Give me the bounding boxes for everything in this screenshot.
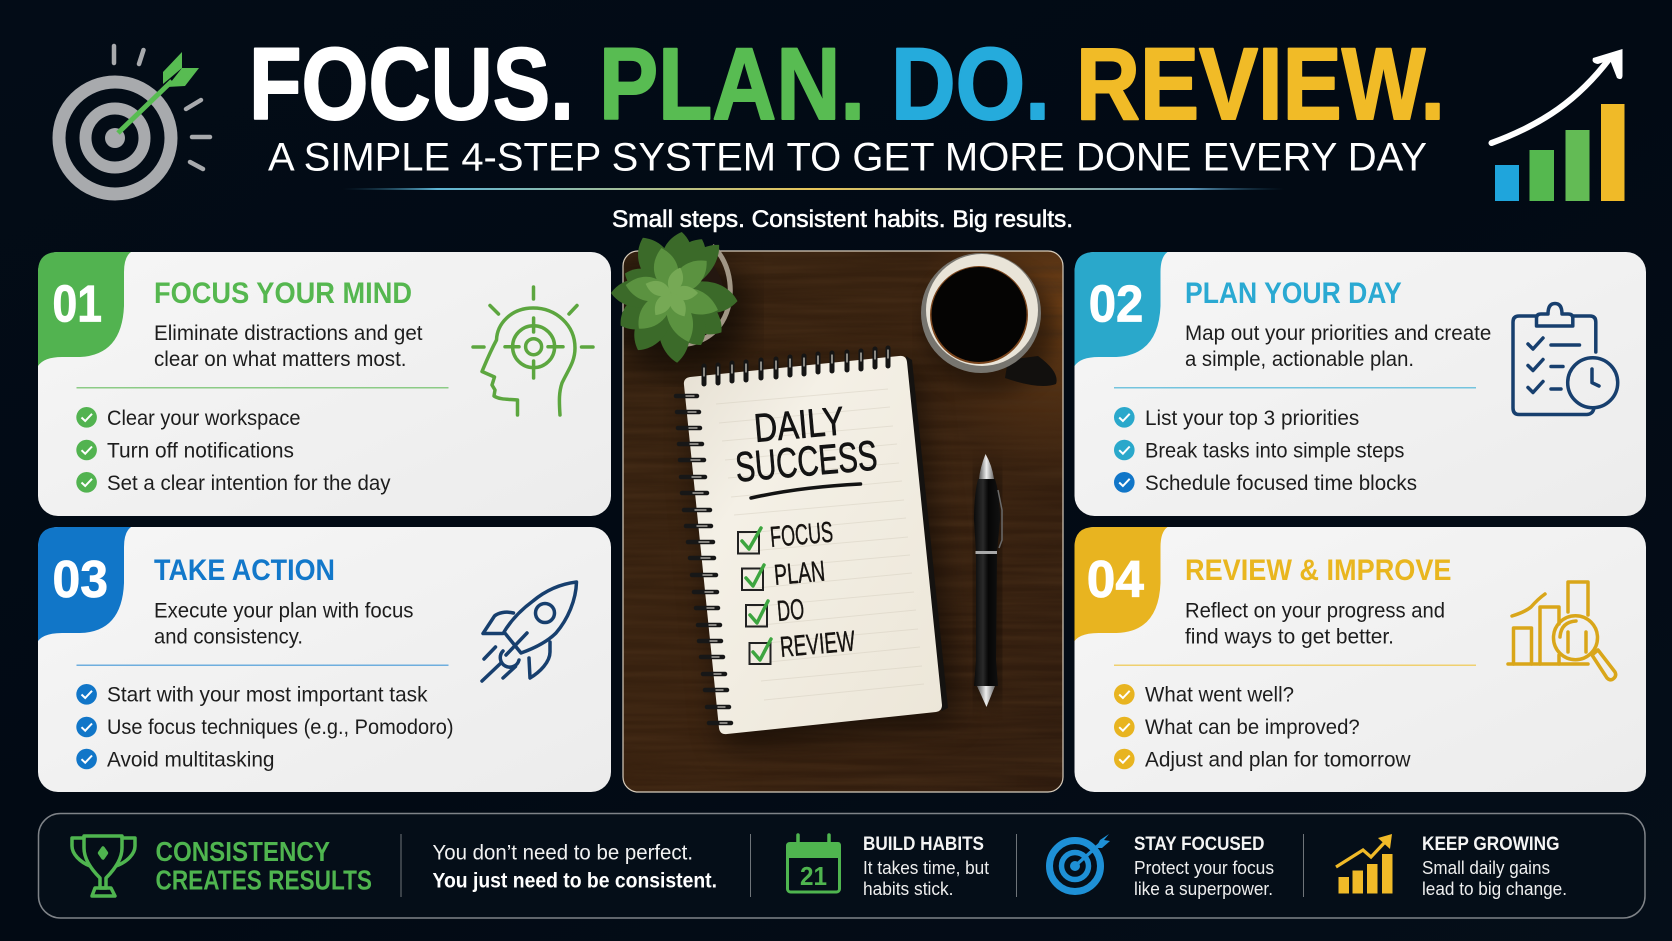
- notebook checklist: REVIEW: [779, 626, 857, 664]
- step 03 heading: TAKE ACTION: [154, 554, 335, 587]
- notebook checklist: [738, 517, 857, 664]
- header rule: [343, 188, 1284, 190]
- icon: blue target: [1050, 834, 1110, 892]
- step 03 number: 03: [52, 551, 108, 609]
- tagline: Small steps. Consistent habits. Big results.: [612, 206, 1073, 233]
- keep growing text: Small daily gains: [1422, 857, 1550, 878]
- stay focused text: [1134, 833, 1274, 899]
- step 04 heading: REVIEW & IMPROVE: [1185, 554, 1452, 587]
- step 01 badge: [38, 252, 131, 366]
- step 02 checklist: [1114, 406, 1417, 495]
- icon: rocket: [482, 582, 576, 681]
- subtitle: A SIMPLE 4-STEP SYSTEM TO GET MORE DONE EVERY DAY: [268, 136, 1427, 180]
- step 04 description: Reflect on your progress and: [1185, 598, 1445, 622]
- consistency heading: CONSISTENCY: [156, 836, 330, 867]
- keep growing text: KEEP GROWING: [1422, 833, 1560, 855]
- keep growing text: lead to big change.: [1422, 878, 1567, 899]
- step 02 badge: [1074, 252, 1168, 366]
- title: FOCUS.: [249, 27, 574, 141]
- potted succulent: [611, 229, 739, 364]
- consistency message: You just need to be consistent.: [432, 870, 717, 892]
- step 03 checklist: Start with your most important task: [107, 683, 428, 707]
- stay focused text: Protect your focus: [1134, 857, 1274, 878]
- icon: yellow growth bars: [1336, 834, 1392, 894]
- pen: [974, 454, 1002, 707]
- stay focused text: like a superpower.: [1134, 878, 1273, 899]
- step 01 checklist: Set a clear intention for the day: [107, 471, 391, 495]
- step 03 description: and consistency.: [154, 624, 303, 648]
- consistency message: [432, 842, 717, 892]
- notebook checklist: FOCUS: [769, 517, 834, 554]
- keep growing text: [1422, 833, 1567, 899]
- step 04 description: find ways to get better.: [1185, 624, 1394, 648]
- step 04 checklist: What went well?: [1145, 683, 1294, 707]
- notebook handwriting: SUCCESS: [733, 431, 879, 491]
- build habits text: BUILD HABITS: [863, 833, 984, 855]
- step 02 number: 02: [1089, 276, 1143, 334]
- coffee mug: [921, 253, 1057, 386]
- step 02 checklist: Schedule focused time blocks: [1145, 471, 1417, 495]
- header icon: growth chart with arrow: [1492, 49, 1624, 201]
- panel: bottom consistency bar: [38, 814, 1645, 918]
- step 01 description: [154, 321, 423, 371]
- step 04 badge: [1074, 527, 1168, 641]
- consistency heading: CREATES RESULTS: [156, 864, 372, 896]
- panel: step 04 review and improve: [1074, 527, 1646, 792]
- consistency heading: [156, 836, 372, 896]
- icon: calendar 21: [786, 835, 841, 892]
- step 04 checklist: Adjust and plan for tomorrow: [1145, 748, 1411, 772]
- header icon: target with arrow: [59, 46, 210, 194]
- notebook ruled lines: [716, 389, 924, 700]
- panel: step 01 focus your mind: [38, 252, 611, 516]
- panel: center desk photo illustration: [610, 229, 1063, 792]
- step 02 heading: PLAN YOUR DAY: [1185, 277, 1402, 310]
- notebook handwriting: [730, 397, 879, 491]
- notebook handwriting: DAILY: [752, 399, 846, 451]
- icon: clipboard with clock: [1513, 304, 1618, 414]
- step 02 description: Map out your priorities and create: [1185, 321, 1491, 345]
- title: [249, 27, 1445, 141]
- step 02 description: a simple, actionable plan.: [1185, 347, 1414, 371]
- step 03 description: Execute your plan with focus: [154, 598, 414, 622]
- icon: head with target: [473, 287, 593, 415]
- step 01 number: 01: [52, 276, 102, 334]
- build habits text: It takes time, but: [863, 857, 989, 878]
- step 03 checklist: Use focus techniques (e.g., Pomodoro): [107, 715, 454, 739]
- title: REVIEW.: [1076, 27, 1445, 141]
- step 04 description: [1185, 598, 1445, 648]
- step 02 checklist: List your top 3 priorities: [1145, 406, 1359, 430]
- notebook top spiral binding: [704, 348, 888, 384]
- step 03 checklist: Avoid multitasking: [107, 748, 274, 772]
- notebook checklist: PLAN: [773, 556, 826, 592]
- step 04 checklist: [1114, 683, 1411, 772]
- icon: calendar 21: 21: [800, 861, 827, 891]
- step 03 badge: [38, 527, 131, 641]
- step 04 checklist: What can be improved?: [1145, 715, 1360, 739]
- title: DO.: [891, 27, 1050, 141]
- stay focused text: STAY FOCUSED: [1134, 833, 1264, 855]
- title: PLAN.: [599, 27, 865, 141]
- step 03 checklist: [76, 683, 454, 772]
- icon: bar chart with magnifier: [1508, 582, 1616, 680]
- step 04 number: 04: [1087, 551, 1144, 609]
- notebook checklist: DO: [776, 594, 806, 628]
- build habits text: habits stick.: [863, 878, 954, 899]
- step 01 checklist: [76, 406, 391, 495]
- step 01 description: clear on what matters most.: [154, 347, 406, 371]
- panel: step 03 take action: [38, 527, 611, 792]
- step 03 description: [154, 598, 414, 648]
- step 01 description: Eliminate distractions and get: [154, 321, 423, 345]
- build habits text: [863, 833, 989, 899]
- notebook underline: [751, 484, 860, 498]
- step 02 description: [1185, 321, 1491, 371]
- step 01 checklist: Turn off notifications: [107, 438, 294, 462]
- notebook left spiral binding: [676, 396, 731, 723]
- consistency message: You don’t need to be perfect.: [432, 842, 693, 864]
- panel: step 02 plan your day: [1074, 252, 1646, 516]
- step 02 checklist: Break tasks into simple steps: [1145, 438, 1404, 462]
- step 01 checklist: Clear your workspace: [107, 406, 300, 430]
- icon: trophy: [72, 836, 135, 896]
- notebook: [676, 348, 948, 734]
- step 01 heading: FOCUS YOUR MIND: [154, 277, 412, 310]
